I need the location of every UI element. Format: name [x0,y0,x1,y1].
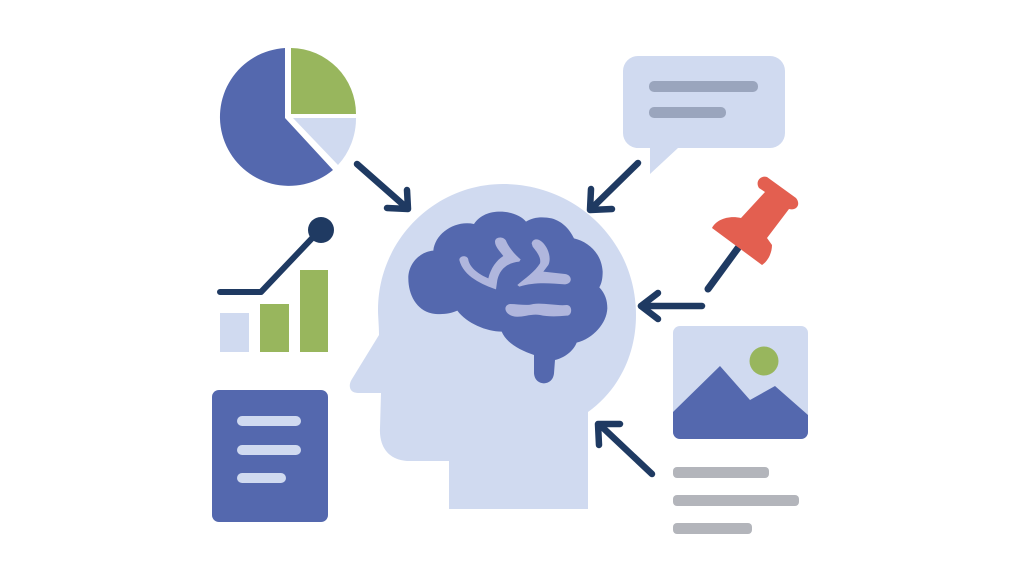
arrow: bubble to head [590,163,638,210]
head silhouette [350,184,636,509]
document icon [212,390,328,522]
text lines placeholder [673,467,799,534]
arrow: pie to head [357,164,408,209]
brain [408,212,607,383]
line and bar chart icon [220,217,334,352]
image icon [673,326,808,439]
push pin icon [708,177,798,289]
speech bubble icon [623,56,785,174]
arrow: image to head [598,424,652,474]
brain folds [459,238,571,317]
pie chart icon [220,48,356,186]
arrow: pin to head [641,293,702,319]
